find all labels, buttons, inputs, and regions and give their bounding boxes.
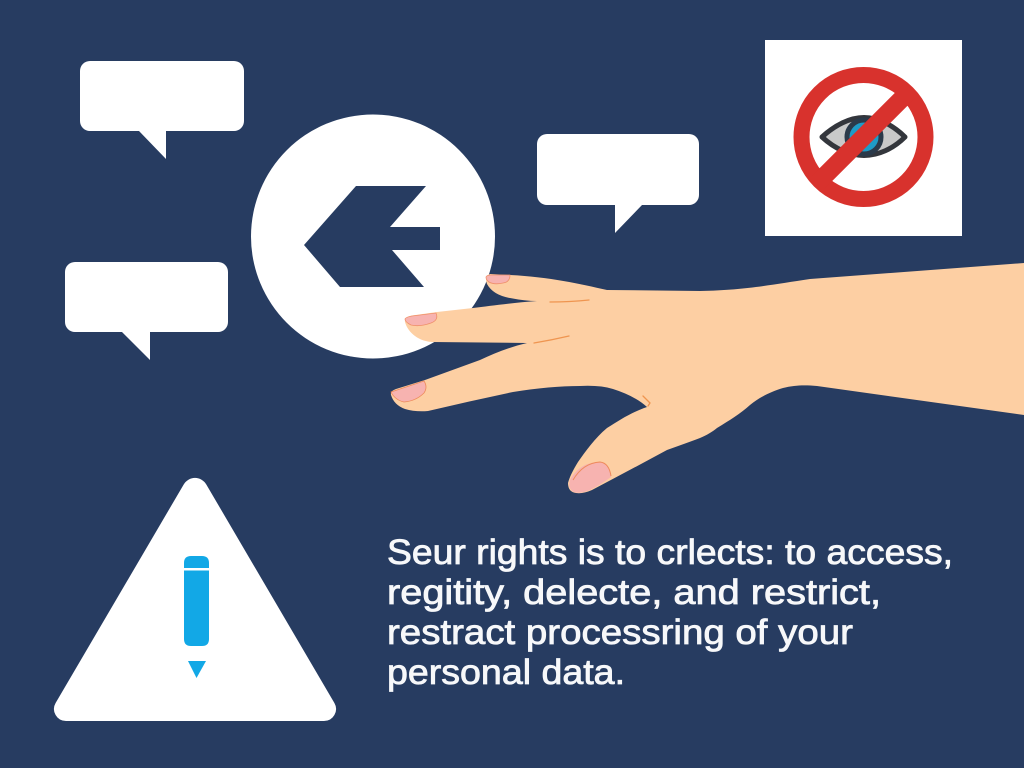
nail: index finger [391, 381, 426, 402]
text block: rights statement: Seur rights is to crlects: to access, [387, 533, 953, 572]
pencil [184, 556, 209, 678]
nail: middle finger [405, 313, 437, 326]
nail edge: thumb [573, 462, 611, 480]
speech bubble: middle left [65, 262, 228, 360]
text block: rights statement [387, 533, 953, 692]
speech bubble: top left [80, 61, 244, 159]
icon: back arrow in white circle [251, 114, 495, 358]
icon: crossed-out eye panel [765, 40, 962, 236]
knuckle creases [534, 300, 650, 406]
text block: rights statement: restract processring of your [387, 613, 853, 652]
text block: rights statement: personal data. [387, 653, 625, 692]
icon: warning triangle with pencil [54, 478, 336, 721]
nail: top finger [486, 275, 510, 284]
nail: thumb [569, 462, 611, 493]
speech bubble: top centre [537, 134, 699, 233]
illustration: reaching hand [391, 263, 1024, 493]
text block: rights statement: regitity, delecte, and restrict, [387, 573, 881, 612]
